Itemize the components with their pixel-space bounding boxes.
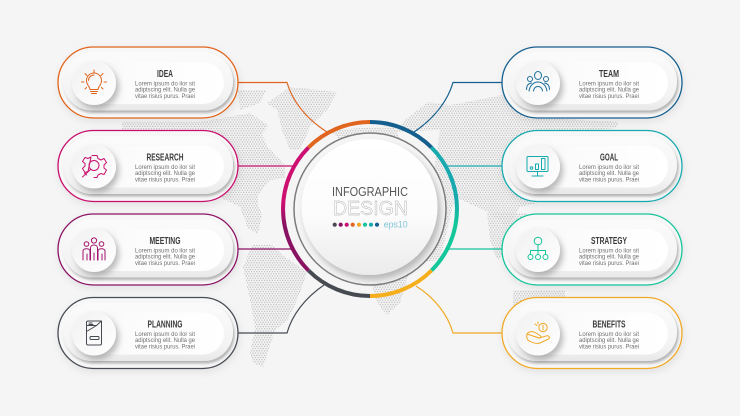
icon: org chart [528,237,548,260]
icon: gear with magnifier [82,156,106,178]
text block: meeting: Lorem ipsum do ilor sit [135,248,195,254]
text block: planning: adiptscing elit. Nulla ge [135,337,195,344]
heading: meeting: MEETING [150,235,180,247]
connector: research [238,165,294,167]
panel: research [58,130,238,202]
text block: idea [135,80,195,100]
connector: team [414,82,502,132]
icon: light bulb [82,70,106,94]
connector: meeting [238,248,292,250]
heading: goal: GOAL [600,151,618,163]
icon: monitor chart [527,156,548,176]
icon: team people [526,72,550,91]
heading: planning: PLANNING [148,318,182,330]
text block: goal: adiptscing elit. Nulla ge [579,170,639,177]
panel: team [502,47,682,118]
label: eps10: eps10 [384,220,408,230]
connector: goal [446,165,502,167]
text block: benefits: Lorem ipsum do ilor sit [579,331,639,338]
text block: research: adiptscing elit. Nulla ge [135,170,195,177]
text block: planning: Lorem ipsum do ilor sit [135,331,195,338]
title: design: DESIGN [333,198,408,220]
connector: benefits [416,286,502,333]
heading: strategy: STRATEGY [591,235,627,247]
text block: planning: vitae risius purus. Praei [135,343,195,350]
text block: benefits: adiptscing elit. Nulla ge [579,337,639,344]
text block: team: Lorem ipsum do ilor sit [579,80,639,88]
connector: strategy [448,248,502,250]
connector: planning [238,285,324,333]
panel: strategy [502,214,682,285]
colour dots [333,223,379,227]
text block: strategy: Lorem ipsum do ilor sit [579,248,639,254]
text block: benefits [579,331,639,350]
icon: document [86,321,102,345]
text block: benefits: vitae risius purus. Praei [579,343,639,350]
text block: idea: adiptscing elit. Nulla ge [135,87,195,94]
central disc [302,139,438,275]
text block: planning [135,331,195,350]
inner gray ring [294,133,446,285]
text block: meeting: vitae risius purus. Praei [135,260,195,267]
text block: idea: Lorem ipsum do ilor sit [135,80,195,88]
text block: meeting: adiptscing elit. Nulla ge [135,254,195,261]
text block: team [579,80,639,100]
text block: goal: vitae risius purus. Praei [579,176,639,183]
text block: strategy [579,248,639,267]
text block: team: adiptscing elit. Nulla ge [579,87,639,94]
panel: meeting [58,214,238,285]
dotted world map [122,87,618,367]
text block: team: vitae risius purus. Praei [579,93,639,100]
segmented outer ring [283,122,457,296]
connector: idea [238,82,327,132]
text block: goal [579,164,639,183]
heading: benefits: BENEFITS [592,318,626,330]
heading: team: TEAM [599,68,619,80]
text block: research: Lorem ipsum do ilor sit [135,164,195,171]
panel: idea [58,47,238,118]
panel: goal [502,130,682,202]
text block: strategy: adiptscing elit. Nulla ge [579,254,639,261]
icon: meeting people [83,238,105,260]
text block: research [135,164,195,183]
panel: planning [58,298,238,368]
text block: goal: Lorem ipsum do ilor sit [579,164,639,171]
text block: idea: vitae risius purus. Praei [135,93,195,100]
icon: hand with coin [527,322,549,343]
heading: research: RESEARCH [146,151,184,163]
title: infographic: INFOGRAPHIC [332,184,408,199]
text block: strategy: vitae risius purus. Praei [579,260,639,267]
text block: meeting [135,248,195,267]
panel: benefits [502,298,682,368]
heading: idea: IDEA [157,68,173,80]
text block: research: vitae risius purus. Praei [135,176,195,183]
